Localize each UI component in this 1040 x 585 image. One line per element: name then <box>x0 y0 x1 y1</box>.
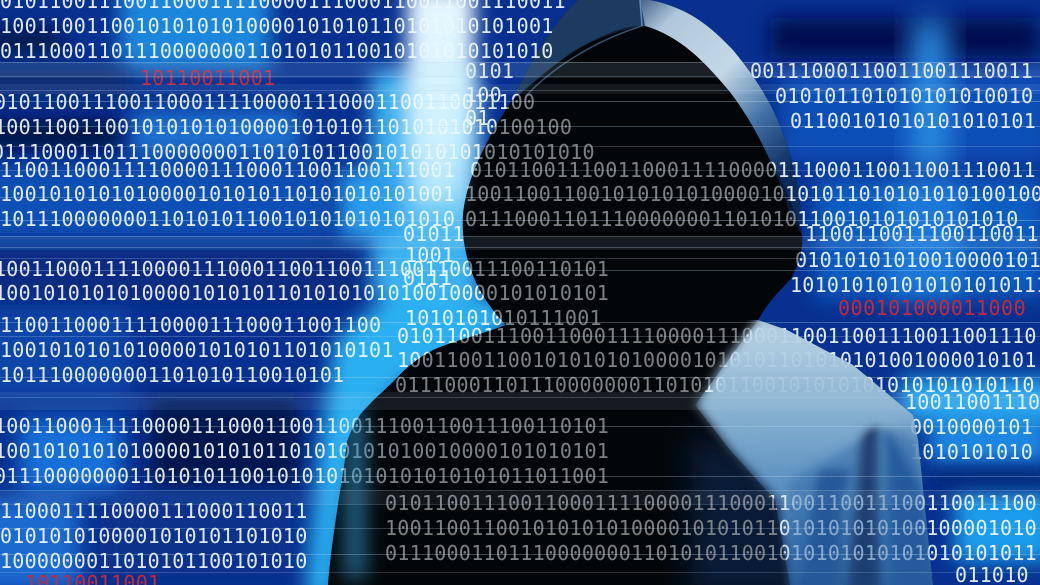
lower left block <box>0 414 609 573</box>
upper left block: 100110011001010101010000101010110101010101001 <box>0 14 554 38</box>
lower right block: 1010101010 <box>910 440 1033 464</box>
upper right block: 0101100111001100011110000111000110011001110011 <box>470 158 1036 182</box>
middle left block: 1001010101010000101010110101010101001 <box>0 182 455 206</box>
middle left block: 10010101010100001010101101010101 <box>0 338 394 362</box>
middle left block <box>0 158 609 387</box>
upper right block: 010101101010101010010 <box>775 84 1033 108</box>
upper left block: 0111000110111000000011010101100101010101010101010 <box>0 140 595 164</box>
lower left block: 10010101010100001010101101010101010010000101010101 <box>0 439 609 463</box>
upper left block: 01011001110011000111100001110001100110011100 <box>0 90 535 114</box>
dimming overlay on figure <box>328 26 933 585</box>
upper left block: 011100011011100000001101010110010101010101010 <box>0 39 554 63</box>
bright central glow <box>305 0 510 585</box>
upper right block: 100110011001010101010000101010110101010101001000 <box>465 182 1040 206</box>
lower right block: 10011001110 <box>905 390 1040 414</box>
navy haze left of the lit sweater <box>690 430 800 585</box>
middle left block: 10010101010100001010101101010101010010000101010101 <box>0 281 609 305</box>
lower right block: 1001100110010101010100001010101101010101001000010101 <box>397 348 1037 372</box>
red code fragments: 000101000011000 <box>838 296 1026 320</box>
lower right block: 0101100111001100011110000111000110011001110011001110 <box>397 324 1037 348</box>
sleeve shading <box>885 420 932 585</box>
lower left block: 01110000000110101011001010101010101010101011011001 <box>0 464 609 488</box>
lower left block: 10011000111100001110001100110011100110011100110101 <box>0 414 609 438</box>
hood rim <box>640 0 802 235</box>
middle left block: 1100110001111000011100011001100111001 <box>0 158 455 182</box>
middle left block: 1001 <box>405 243 454 267</box>
soft vertical light at upper right <box>912 20 948 170</box>
upper right block <box>465 59 1040 297</box>
middle left block: 1011100000001101010110010101 <box>0 363 344 387</box>
red code fragments: 10110011001 <box>140 66 275 90</box>
lower right block: 01011001110011000111100001110001100110011100110011100 <box>385 491 1037 515</box>
upper left block: 100 <box>465 83 502 107</box>
upper left block: 10011001100101010101000010101011010101010100100 <box>0 115 572 139</box>
lower left block: 0101010100001010101101010 <box>0 524 308 548</box>
middle left block: 1100110001111000011100011001100 <box>0 313 381 337</box>
upper left block: 01 <box>465 106 490 130</box>
dark patch under shoulder <box>796 470 852 585</box>
figure: hooded silhouette <box>328 0 945 585</box>
shoulder veil over code <box>710 316 933 585</box>
lower right block: 10011001100101010101000010101011010101010100100001010 <box>385 516 1037 540</box>
lower left block: 1100011110000111000110011 <box>0 499 308 523</box>
dark body and hood <box>328 0 933 585</box>
shoulder <box>690 316 945 585</box>
middle left block: 1011100000001101010110010101010101010 <box>0 207 455 231</box>
upper right block: 011100011011100000001101010110010101010101010 <box>465 207 1019 231</box>
hood left fold <box>512 0 650 100</box>
upper right block: 00111000110011001110011 <box>750 59 1033 83</box>
middle left block: 01011 <box>403 222 465 246</box>
arm shadow <box>848 425 880 585</box>
lower right block <box>385 324 1040 585</box>
middle left block: 10011000111100001110001100110011100110011100110101 <box>0 257 609 281</box>
upper right block: 01100101010101010101 <box>790 109 1036 133</box>
lower right block: 0010000101 <box>910 415 1033 439</box>
middle left block: 1010101010111001 <box>405 306 602 330</box>
hood crease <box>526 0 642 96</box>
lower right block: 01110001101110000000110101011001010101010101010101011 <box>385 541 1037 565</box>
upper left block <box>0 0 595 164</box>
lower left block: 1000000011010101100101010 <box>0 549 308 573</box>
washed-out light over code <box>345 0 460 580</box>
upper right block: 01010101010010000101 <box>795 248 1040 272</box>
upper left block: 0101 <box>465 59 514 83</box>
middle left block: 0111 <box>403 266 452 290</box>
lower right block: 0111000110111000000011010101100101010101010101010110 <box>395 373 1035 397</box>
